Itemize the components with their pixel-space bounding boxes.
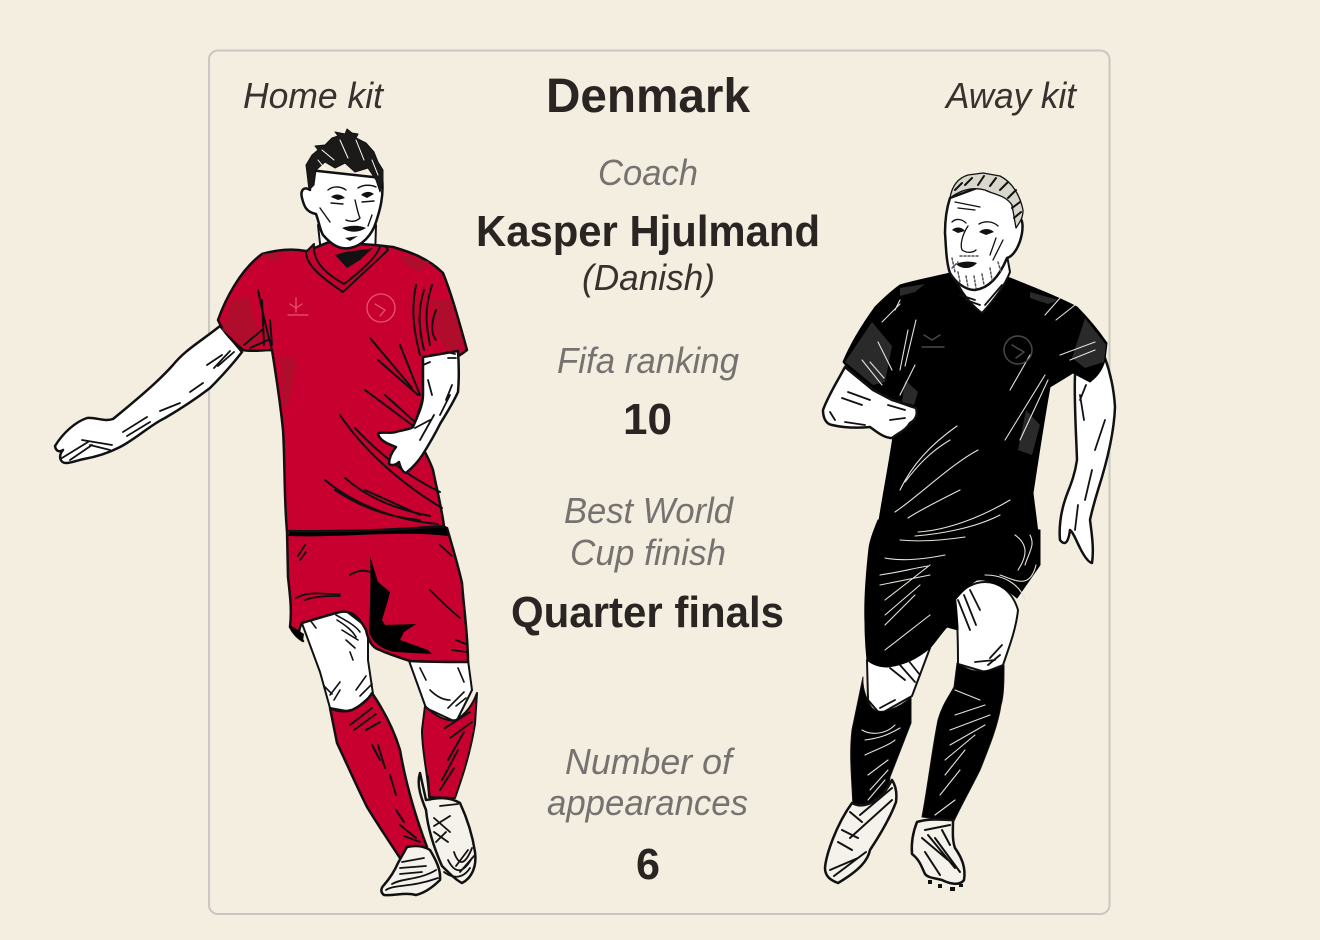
face lines xyxy=(952,202,1003,260)
sleeve panels xyxy=(845,284,1106,455)
text block: best World Cup finish xyxy=(511,490,784,637)
left boot xyxy=(825,780,896,883)
panel: card border xyxy=(209,50,1110,914)
boot hatching xyxy=(386,776,474,890)
text block: number of appearances: appearances xyxy=(547,782,748,823)
text block: Fifa ranking: 10 xyxy=(623,395,672,444)
thigh hatching xyxy=(880,590,1002,708)
neck xyxy=(318,225,376,282)
shirt hatching xyxy=(244,285,442,524)
text block: coach: (Danish) xyxy=(582,257,715,298)
shorts shadow xyxy=(288,526,448,654)
thighs xyxy=(867,582,1018,714)
sock hatching xyxy=(350,708,472,842)
knee hatching xyxy=(310,615,466,708)
boot hatching xyxy=(830,788,960,876)
shirt crest and logo xyxy=(288,294,395,322)
heading: Away kit: Away kit xyxy=(944,75,1078,116)
shirt xyxy=(218,242,467,531)
shorts xyxy=(865,520,1040,667)
text block: number of appearances: Number of xyxy=(565,741,736,782)
stubble xyxy=(952,256,1001,288)
heading: Home kit: Home kit xyxy=(243,75,385,116)
neck hatching xyxy=(960,285,1002,305)
text block: Fifa ranking xyxy=(557,340,739,444)
shorts hatching xyxy=(296,545,466,652)
right arm and hand xyxy=(378,351,459,473)
thighs xyxy=(300,608,472,722)
left sock xyxy=(851,677,911,808)
shirt collar xyxy=(306,244,388,292)
shirt sleeve shading xyxy=(222,252,464,410)
front sock xyxy=(330,693,427,858)
text block: best World Cup finish: Best World xyxy=(564,490,734,531)
right sock xyxy=(922,663,1004,821)
face lines xyxy=(320,185,376,226)
illustration: player in red home kit xyxy=(55,129,477,895)
left arm and hand xyxy=(823,367,917,438)
text block: coach: Kasper Hjulmand xyxy=(476,207,820,256)
arm hatching xyxy=(62,351,456,460)
right boot xyxy=(912,820,965,884)
boot studs xyxy=(928,880,963,891)
head xyxy=(945,185,1023,290)
text block: best World Cup finish: Cup finish xyxy=(570,532,726,573)
text block: best World Cup finish: Quarter finals xyxy=(511,588,784,637)
text block: coach xyxy=(476,152,820,298)
left arm and hand xyxy=(55,326,242,463)
crest and logo xyxy=(922,335,1032,364)
hair texture xyxy=(955,176,1021,218)
right arm and hand xyxy=(1060,358,1115,563)
hair xyxy=(306,129,383,192)
title: Denmark: Denmark xyxy=(546,70,750,123)
hair highlights xyxy=(318,140,378,175)
text block: number of appearances xyxy=(547,741,748,889)
shorts xyxy=(287,528,468,662)
head xyxy=(301,170,383,248)
text block: number of appearances: 6 xyxy=(636,840,660,889)
text block: coach: Coach xyxy=(598,152,698,193)
eyes and mouth xyxy=(952,227,994,268)
shirt xyxy=(843,273,1107,571)
shirt highlights xyxy=(862,298,1095,815)
text block: Fifa ranking: Fifa ranking xyxy=(557,340,739,381)
arm hatching xyxy=(830,385,1105,530)
neck xyxy=(952,250,1010,313)
hair xyxy=(950,173,1023,228)
front boot xyxy=(381,846,440,895)
back socks and boot xyxy=(422,693,477,798)
eyes and mouth xyxy=(331,192,374,268)
illustration: player in black away kit xyxy=(823,173,1115,891)
